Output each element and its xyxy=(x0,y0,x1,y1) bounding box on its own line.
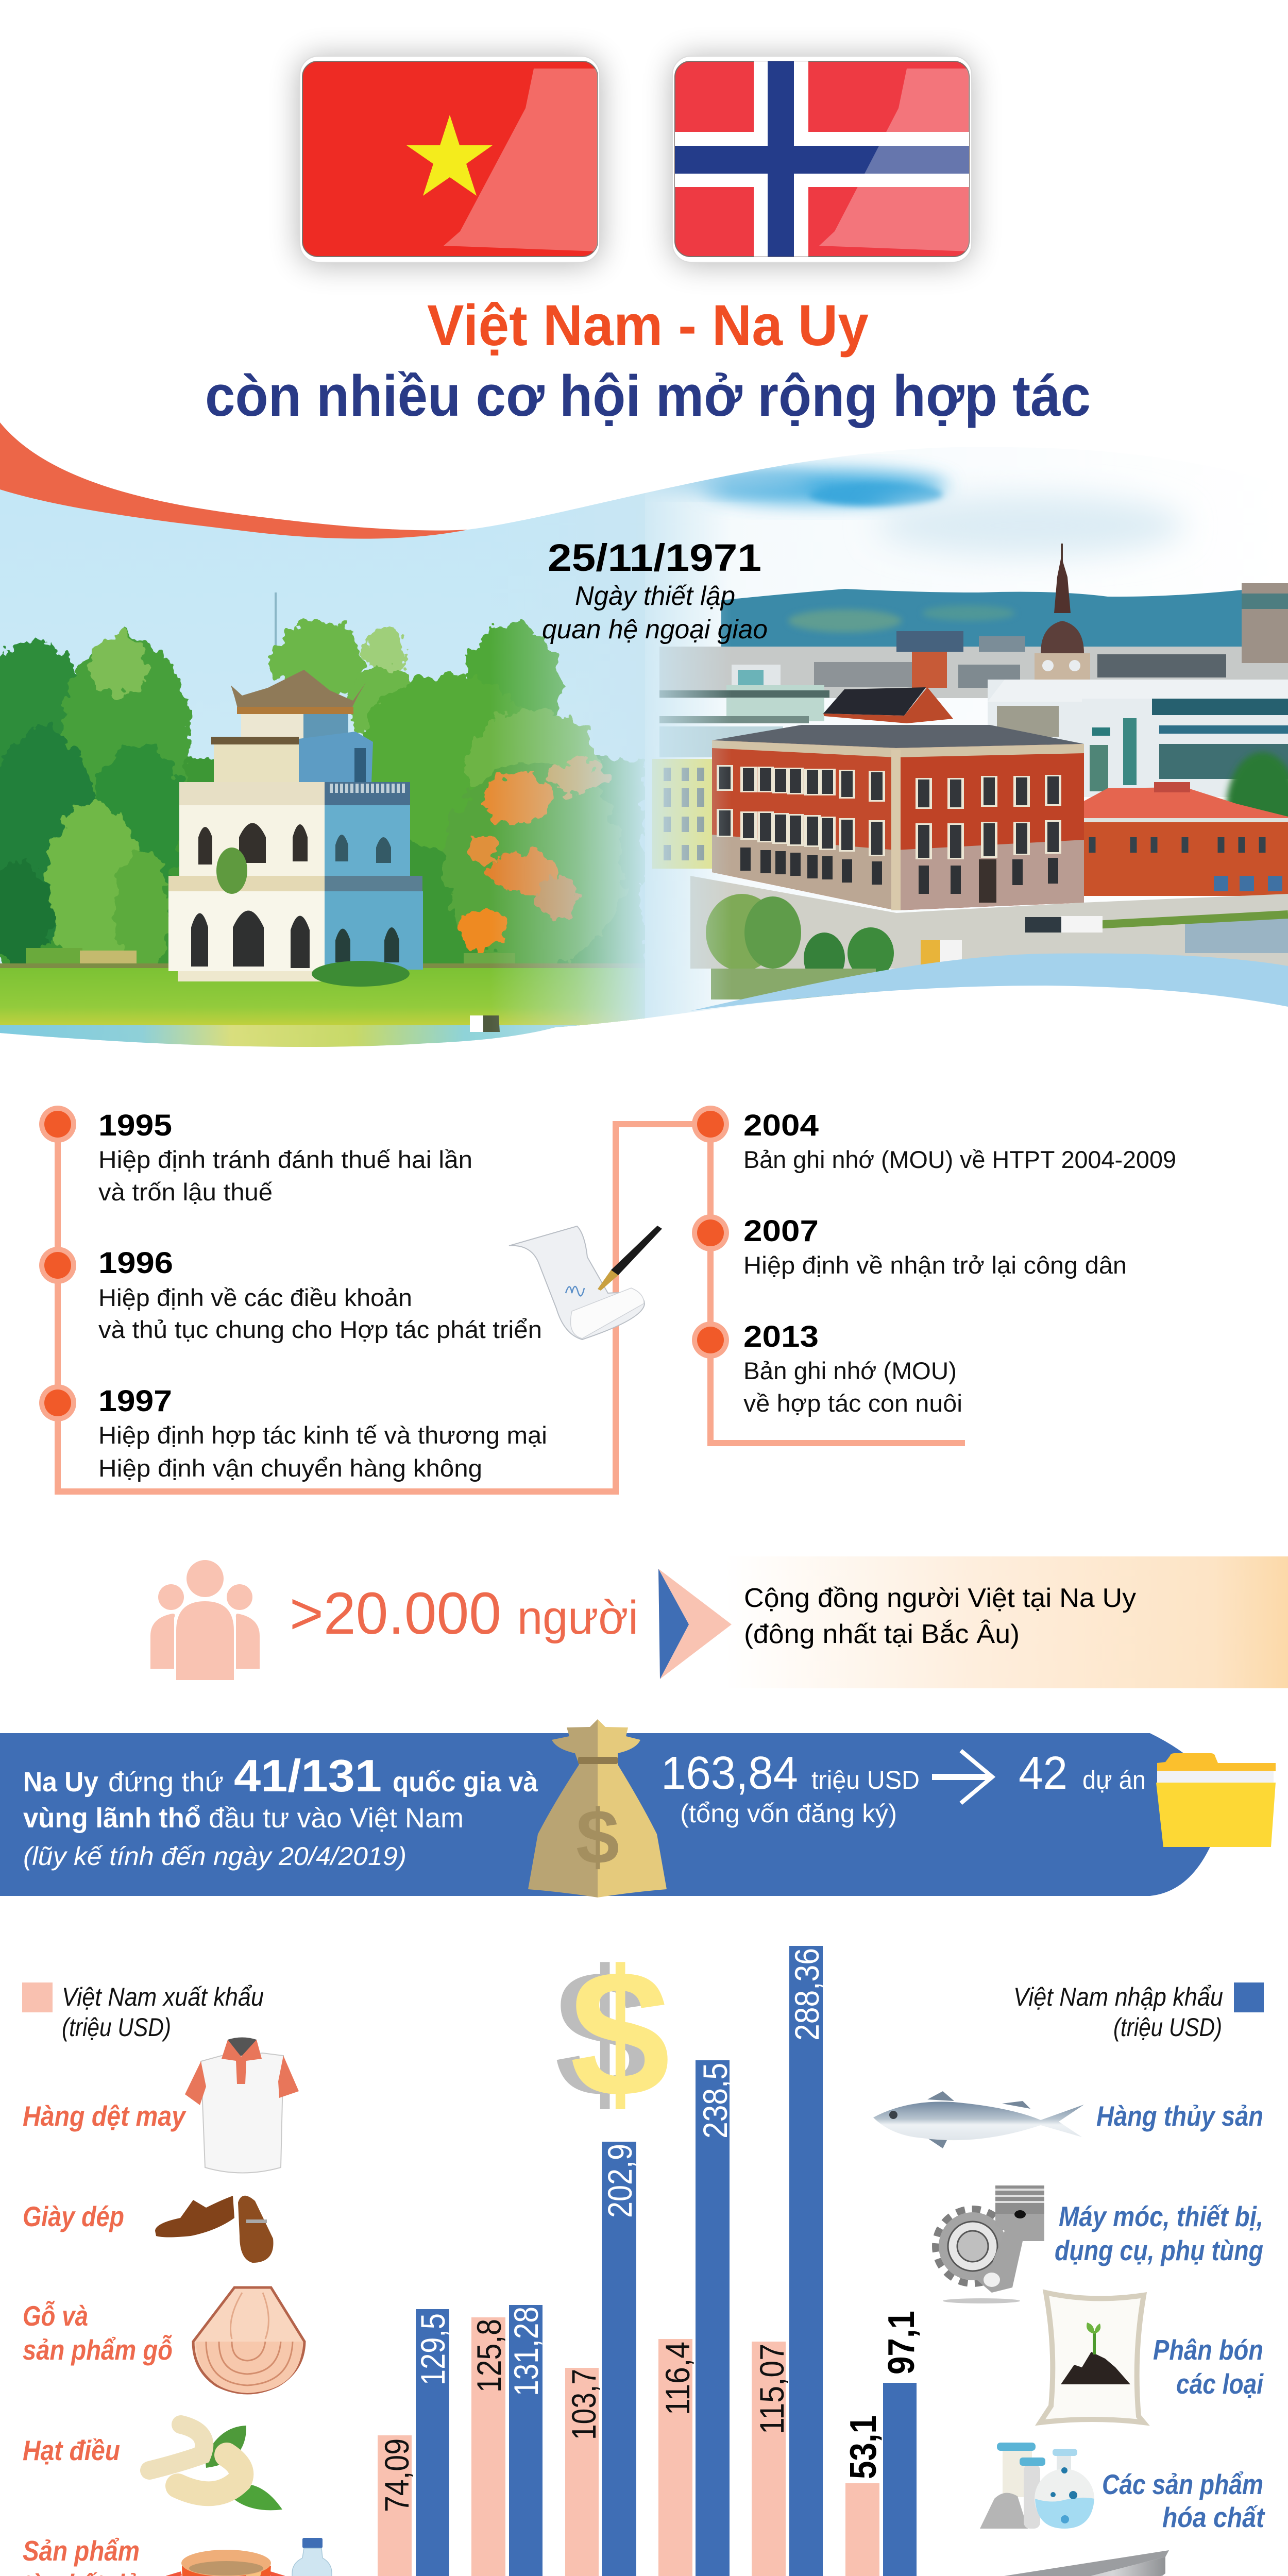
orange wave xyxy=(0,422,468,539)
timeline connector line xyxy=(58,1124,965,1492)
light blue wave xyxy=(690,953,1288,1011)
red brick building xyxy=(823,687,926,716)
title: còn nhiều cơ hội mở rộng hợp tác xyxy=(205,364,1091,428)
timeline entry: 2013: về hợp tác con nuôi xyxy=(743,1389,962,1417)
timeline entry: 1997: Hiệp định vận chuyển hàng không xyxy=(98,1454,482,1482)
legend: imports xyxy=(1013,1982,1264,2042)
bar value labels: 53,1 xyxy=(843,2415,884,2479)
import item: seafood xyxy=(873,2091,1263,2148)
legend: imports: Việt Nam nhập khẩu xyxy=(1013,1982,1223,2011)
icon: people xyxy=(150,1560,260,1680)
church tower xyxy=(1035,544,1090,682)
export item: plastics: Sản phẩm xyxy=(23,2535,140,2567)
date block: Ngày thiết lập xyxy=(575,581,735,611)
icon: chemistry flasks xyxy=(980,2443,1094,2529)
legend: imports: (triệu USD) xyxy=(1113,2013,1222,2042)
bar value labels: 288,36 xyxy=(788,1948,826,2041)
stat: projects: 42 xyxy=(1019,1748,1067,1799)
timeline entry: 1997: 1997 xyxy=(98,1384,172,1418)
bar value labels: 202,9 xyxy=(601,2144,639,2218)
icon: money bag: $ xyxy=(576,1793,619,1880)
icon: money bag xyxy=(528,1719,667,1897)
community description: (đông nhất tại Bắc Âu) xyxy=(744,1619,1020,1649)
arrow marker xyxy=(658,1569,732,1679)
investment rank text xyxy=(23,1750,538,1871)
investment rank text: (lũy kế tính đến ngày 20/4/2019) xyxy=(23,1842,406,1871)
timeline entry: 2004: Bản ghi nhớ (MOU) về HTPT 2004-2009 xyxy=(743,1146,1176,1173)
export item: cashew xyxy=(23,2425,282,2510)
date block xyxy=(542,536,768,645)
icon: cashews xyxy=(149,2425,282,2510)
investment rank text: đứng thứ xyxy=(108,1767,224,1798)
timeline entry: 1995 xyxy=(98,1109,472,1206)
icon: wood log xyxy=(193,2287,304,2393)
timeline entry: 2013 xyxy=(743,1320,962,1417)
tower: roof and upper storey xyxy=(168,670,423,987)
timeline dots xyxy=(39,1106,729,1421)
bar value labels: 74,09 xyxy=(378,2438,416,2512)
timeline entry: 2004 xyxy=(743,1109,1176,1173)
stat: registered capital: triệu USD xyxy=(811,1766,920,1794)
export item: textiles: Hàng dệt may xyxy=(23,2100,187,2132)
exports bars xyxy=(378,2317,879,2576)
stat: over 20,000 people xyxy=(290,1581,638,1647)
import item: machinery xyxy=(938,2185,1263,2303)
timeline entry: 1997 xyxy=(98,1384,547,1482)
flag: Vietnam xyxy=(300,56,600,264)
icon: fish xyxy=(873,2091,1084,2148)
bar value labels: 115,07 xyxy=(753,2344,791,2434)
import item: fertilizer: các loại xyxy=(1176,2368,1264,2400)
bar value labels xyxy=(378,1948,922,2512)
timeline entry: 2013: 2013 xyxy=(743,1320,819,1353)
street xyxy=(690,876,1288,969)
timeline entry: 2004: 2004 xyxy=(743,1109,819,1142)
photo: Turtle Tower, Hanoi xyxy=(0,412,645,1082)
stat: over 20,000 people: người xyxy=(517,1591,638,1644)
timeline entry: 2007: 2007 xyxy=(743,1214,819,1248)
import item: fertilizer: Phân bón xyxy=(1153,2334,1263,2366)
icon: scroll and fountain pen xyxy=(509,1226,662,1340)
timeline entry: 1996 xyxy=(98,1246,542,1343)
export item: wood xyxy=(23,2287,304,2393)
community section xyxy=(150,1556,1288,1688)
icon: fertilizer bag xyxy=(1040,2293,1144,2422)
investment rank text: vùng lãnh thổ xyxy=(23,1803,201,1834)
stat: projects: dự án xyxy=(1082,1766,1146,1794)
community description xyxy=(744,1583,1136,1649)
export item: wood: Gỗ và xyxy=(23,2300,88,2332)
stat: projects xyxy=(1019,1748,1146,1799)
icon: shoes xyxy=(155,2196,273,2263)
bar value labels: 97,1 xyxy=(881,2311,922,2375)
legend: exports: Việt Nam xuất khẩu xyxy=(62,1982,264,2011)
flag: Norway xyxy=(672,56,972,264)
timeline entry: 2007 xyxy=(743,1214,1127,1279)
investment rank text: đầu tư vào Việt Nam xyxy=(209,1803,464,1834)
timeline entry: 1995: 1995 xyxy=(98,1109,172,1142)
export item: cashew: Hạt điều xyxy=(23,2434,120,2466)
investment rank text: quốc gia và xyxy=(393,1767,538,1798)
bar value labels: 116,4 xyxy=(658,2342,697,2415)
date block: quan hệ ngoại giao xyxy=(542,615,768,645)
stat: over 20,000 people: >20.000 xyxy=(290,1581,501,1647)
bar value labels: 103,7 xyxy=(565,2369,603,2440)
imports bars xyxy=(416,1946,917,2576)
legend: exports: (triệu USD) xyxy=(62,2013,171,2042)
community description: Cộng đồng người Việt tại Na Uy xyxy=(744,1583,1136,1613)
stat: registered capital: 163,84 xyxy=(661,1748,798,1799)
icon: polo shirt xyxy=(185,2037,299,2173)
photo banner: Hanoi and Oslo xyxy=(0,412,1288,1082)
stat: registered capital xyxy=(661,1748,920,1828)
bar value labels: 129,5 xyxy=(414,2313,452,2385)
trees xyxy=(0,621,645,976)
investment rank text: Na Uy xyxy=(23,1767,98,1798)
stat: registered capital: (tổng vốn đăng ký) xyxy=(680,1799,897,1828)
import item: chemicals xyxy=(980,2443,1265,2533)
icon: steel beam xyxy=(1004,2550,1169,2576)
import item: fertilizer xyxy=(1040,2293,1264,2422)
icon: dollar sign: $ xyxy=(570,1933,670,2134)
timeline entry: 1996: Hiệp định về các điều khoản xyxy=(98,1284,412,1311)
export item: footwear xyxy=(23,2196,273,2263)
date block: 25/11/1971 xyxy=(548,536,761,579)
import item: steel xyxy=(1004,2550,1263,2576)
import item: seafood: Hàng thủy sản xyxy=(1096,2100,1263,2132)
street trees xyxy=(706,894,778,971)
small red building xyxy=(1082,818,1288,896)
gradient band xyxy=(662,1556,1288,1688)
export item: plastics xyxy=(23,2535,332,2576)
export item: textiles xyxy=(23,2037,299,2173)
title xyxy=(205,293,1091,428)
timeline entry: 1995: Hiệp định tránh đánh thuế hai lần xyxy=(98,1146,472,1173)
investment panel xyxy=(0,1719,1276,1897)
bar value labels: 131,28 xyxy=(507,2307,545,2396)
timeline entry: 1995: và trốn lậu thuế xyxy=(98,1178,273,1206)
investment rank text: 41/131 xyxy=(234,1750,382,1801)
icon: gear and piston xyxy=(938,2185,1044,2303)
white office building xyxy=(988,680,1288,797)
icon: dollar sign: $ xyxy=(554,1933,655,2134)
timeline entry: 1996: 1996 xyxy=(98,1246,173,1280)
bar value labels: 125,8 xyxy=(470,2319,508,2393)
yellow building xyxy=(652,759,714,869)
legend: exports xyxy=(22,1982,264,2042)
arrow xyxy=(932,1751,992,1803)
timeline entry: 2013: Bản ghi nhớ (MOU) xyxy=(743,1357,957,1384)
photo: Oslo cityscape xyxy=(629,470,1288,999)
export item: footwear: Giày dép xyxy=(23,2200,124,2232)
timeline entry: 1997: Hiệp định hợp tác kinh tế và thương mại xyxy=(98,1421,547,1449)
bar chart xyxy=(367,1946,938,2576)
title: Việt Nam - Na Uy xyxy=(427,293,869,358)
import item: chemicals: hóa chất xyxy=(1162,2501,1265,2533)
timeline entry: 2007: Hiệp định về nhận trở lại công dân xyxy=(743,1251,1127,1279)
export item: wood: sản phẩm gỗ xyxy=(23,2334,173,2366)
timeline entry: 1996: và thủ tục chung cho Hợp tác phát triển xyxy=(98,1316,542,1343)
icon: plastic cup and bottle xyxy=(166,2538,332,2576)
bar value labels: 238,5 xyxy=(696,2063,734,2139)
icon: folder xyxy=(1156,1753,1276,1847)
lake surface xyxy=(0,968,645,1028)
